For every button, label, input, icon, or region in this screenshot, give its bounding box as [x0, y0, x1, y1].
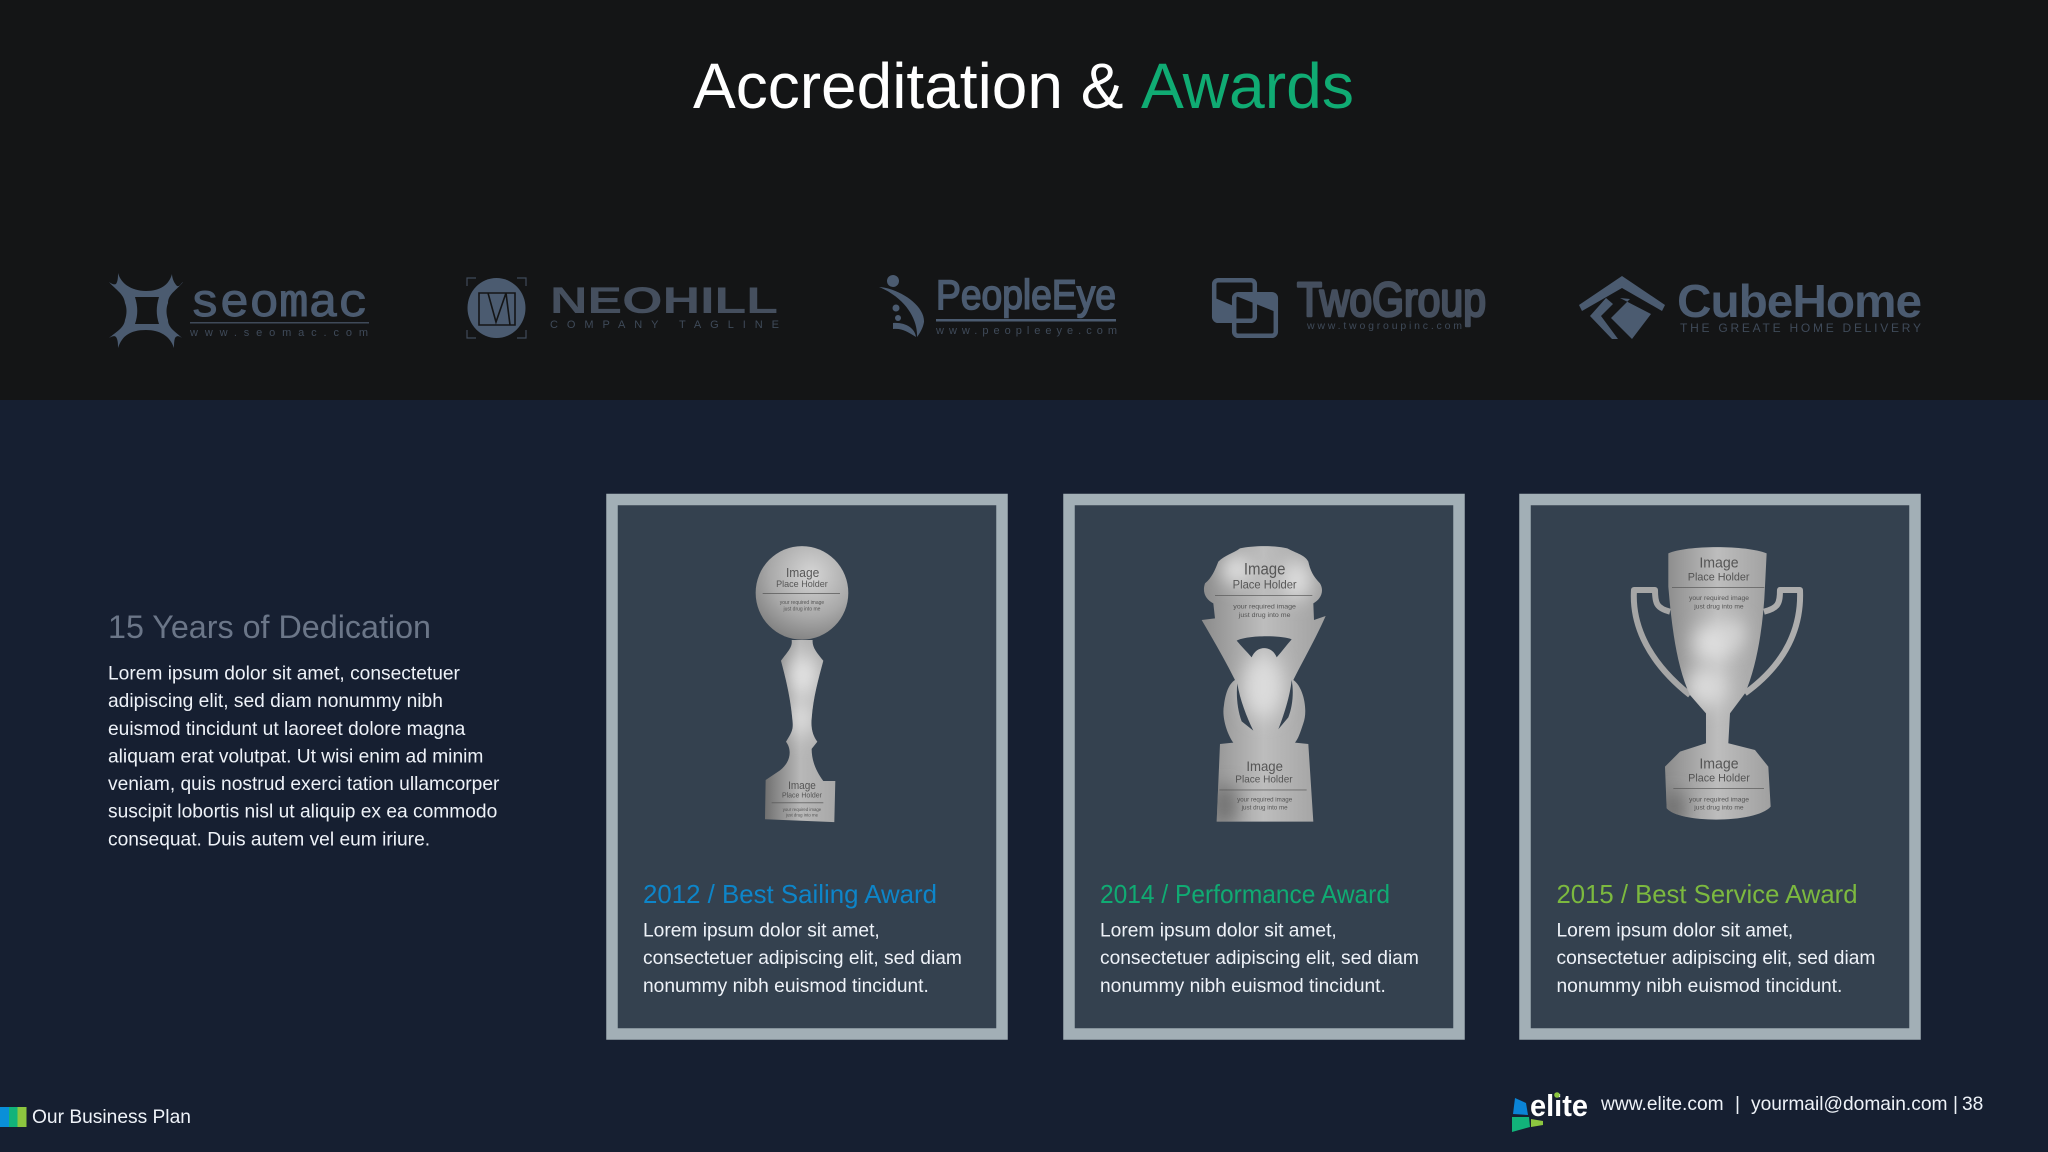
icon: winged figure trophy: your required image	[1237, 798, 1293, 804]
logo: seomac: www.seomac.com	[189, 327, 368, 339]
footer contact line: yourmail@domain.com	[1751, 1094, 1948, 1115]
card text: nonummy nibh euismod tincidunt.	[1556, 976, 1842, 997]
icon: winged figure trophy: just drug into me	[1238, 612, 1291, 619]
intro text block: Lorem ipsum dolor sit amet, consectetuer	[108, 664, 461, 684]
logo: peopleeye: PeopleEye	[936, 271, 1116, 318]
logo: peopleeye	[879, 271, 1117, 337]
icon: ball trophy: Place Holder	[782, 790, 823, 800]
icon: winged figure trophy: Place Holder	[1233, 578, 1297, 591]
card text: consectetuer adipiscing elit, sed diam	[1556, 948, 1875, 969]
logo: cubehome: CubeHome	[1677, 275, 1921, 327]
footer label: Our Business Plan	[32, 1107, 191, 1128]
footer contact line: |	[1735, 1094, 1740, 1115]
icon: winged figure trophy: your required image	[1233, 603, 1296, 610]
footer contact line: |	[1953, 1094, 1958, 1115]
icon: cup trophy: Place Holder	[1688, 773, 1750, 785]
icon: cup trophy: your required image	[1689, 796, 1749, 803]
elite logo	[1512, 1088, 1588, 1132]
icon: cup trophy: Image	[1699, 554, 1739, 571]
icon: ball trophy: your required image	[780, 600, 824, 606]
icon: ball trophy: just drug into me	[785, 813, 818, 818]
icon: cup trophy: Image	[1699, 755, 1739, 772]
footer colour marker	[0, 1107, 26, 1127]
logo: neohill	[467, 278, 779, 338]
card title: 2015 / Best Service Award	[1556, 881, 1858, 909]
icon: ball trophy: your required image	[783, 807, 822, 812]
logo: seomac: seomac	[190, 278, 368, 330]
intro text block: euismod tincidunt ut laoreet dolore magna	[108, 719, 466, 740]
logo: peopleeye: www.peopleeye.com	[935, 325, 1117, 337]
logo: seomac	[109, 273, 369, 348]
elite logo: elite	[1530, 1088, 1588, 1123]
icon: ball trophy: Image	[786, 565, 819, 580]
card text: Lorem ipsum dolor sit amet,	[1100, 920, 1337, 942]
title	[693, 50, 1354, 122]
footer contact line: 38	[1962, 1094, 1983, 1115]
footer contact line: www.elite.com	[1600, 1094, 1724, 1115]
icon: cup trophy: your required image	[1689, 595, 1749, 602]
card text: nonummy nibh euismod tincidunt.	[643, 976, 929, 997]
footer contact line	[1600, 1094, 1983, 1115]
icon: cup trophy: Place Holder	[1688, 572, 1750, 584]
icon: ball trophy: Place Holder	[776, 579, 828, 589]
title: Accreditation &	[693, 50, 1123, 122]
card text: consectetuer adipiscing elit, sed diam	[1100, 948, 1419, 969]
icon: cup trophy	[1634, 547, 1800, 823]
logo: twogroup	[1214, 274, 1486, 336]
icon: winged figure trophy: Image	[1246, 758, 1283, 774]
logo: neohill: COMPANY TAGLINE	[550, 319, 779, 331]
title: Awards	[1141, 50, 1354, 122]
panel: 2014 award card	[1069, 500, 1459, 1034]
card text: nonummy nibh euismod tincidunt.	[1100, 976, 1386, 997]
panel: 2015 award card	[1525, 500, 1915, 1034]
logo: cubehome: THE GREATE HOME DELIVERY	[1680, 321, 1921, 335]
intro text block: adipiscing elit, sed diam nonummy nibh	[108, 691, 443, 712]
icon: winged figure trophy: just drug into me	[1241, 805, 1288, 811]
header band	[0, 0, 2048, 400]
card text: Lorem ipsum dolor sit amet,	[643, 920, 880, 942]
icon: ball trophy: Image	[788, 781, 816, 792]
panel: 2012 award card	[612, 500, 1002, 1034]
intro text block: consequat. Duis autem vel eum iriure.	[108, 830, 430, 850]
card text: consectetuer adipiscing elit, sed diam	[643, 948, 962, 969]
card title: 2014 / Performance Award	[1100, 881, 1390, 909]
intro heading: 15 Years of Dedication	[108, 609, 431, 645]
card text: Lorem ipsum dolor sit amet,	[1556, 920, 1793, 942]
logo: neohill: NEOHILL	[550, 280, 778, 321]
icon: cup trophy: just drug into me	[1693, 804, 1744, 811]
icon: cup trophy: just drug into me	[1693, 603, 1744, 610]
card title: 2012 / Best Sailing Award	[643, 881, 937, 909]
icon: ball trophy	[756, 546, 848, 822]
icon: winged figure trophy: Image	[1244, 559, 1285, 578]
intro text block: suscipit lobortis nisl ut aliquip ex ea commodo	[108, 802, 497, 822]
logo: twogroup: www.twogroupinc.com	[1306, 320, 1462, 332]
icon: winged figure trophy: Place Holder	[1235, 775, 1293, 786]
logo: cubehome	[1579, 275, 1921, 339]
icon: ball trophy: just drug into me	[783, 607, 821, 613]
intro text block: veniam, quis nostrud exerci tation ullamcorper	[108, 774, 500, 795]
icon: winged figure trophy	[1202, 546, 1326, 823]
intro text block: aliquam erat volutpat. Ut wisi enim ad minim	[108, 746, 483, 768]
logo: twogroup: TwoGroup	[1297, 274, 1486, 327]
